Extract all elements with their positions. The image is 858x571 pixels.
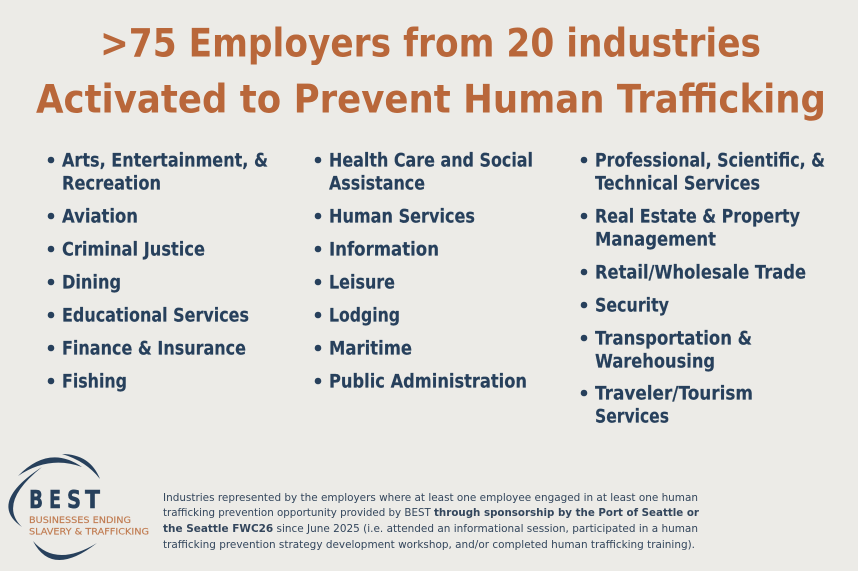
icon: BEST logo: BUSINESSES ENDING: [29, 516, 131, 526]
icon: BEST logo: SLAVERY & TRAFFICKING: [29, 528, 149, 538]
panel: industry list column 2: Assistance: [329, 174, 425, 195]
panel: industry list column 1: Fishing: [62, 372, 127, 393]
panel: industry list column 3: Technical Services: [595, 174, 760, 195]
panel: industry list column 3: Management: [595, 230, 716, 251]
icon: BEST logo: B: [29, 485, 43, 514]
footnote text: the Seattle FWC26 since June 2025 (i.e. attended an informational session, participated in a human: [163, 523, 698, 535]
footnote text: trafficking prevention strategy development workshop, and/or completed human trafficking training).: [163, 539, 695, 551]
panel: industry list column 2: [315, 151, 533, 393]
panel: industry list column 1: Dining: [62, 273, 121, 294]
panel: industry list column 1: Arts, Entertainment, &: [62, 151, 268, 172]
panel: industry list column 2: Lodging: [329, 306, 400, 327]
panel: industry list column 3: Retail/Wholesale Trade: [595, 263, 806, 284]
panel: industry list column 1: Finance & Insurance: [62, 339, 246, 360]
icon: BEST logo: S: [67, 485, 81, 514]
panel: industry list column 3: [581, 151, 825, 428]
icon: BEST logo: [8, 454, 149, 560]
panel: industry list column 3: Traveler/Tourism: [595, 384, 753, 405]
panel: industry list column 1: Educational Services: [62, 306, 249, 327]
panel: industry list column 3: Services: [595, 407, 669, 428]
panel: industry list column 1: [48, 151, 268, 393]
panel: industry list column 2: Maritime: [329, 339, 412, 360]
footnote text: Industries represented by the employers where at least one employee engaged in at least one human: [163, 492, 698, 504]
panel: industry list column 2: Human Services: [329, 207, 475, 228]
panel: industry list column 2: Leisure: [329, 273, 395, 294]
panel: industry list column 3: Real Estate & Property: [595, 207, 800, 228]
panel: industry list column 2: Public Administration: [329, 372, 527, 393]
panel: industry list column 3: Transportation &: [595, 329, 752, 350]
panel: industry list column 3: Warehousing: [595, 352, 715, 373]
icon: BEST logo: E: [49, 485, 61, 514]
footnote text: [163, 492, 700, 551]
panel: industry list column 1: Criminal Justice: [62, 240, 205, 261]
icon: BEST logo: T: [85, 485, 100, 514]
panel: industry list column 1: Aviation: [62, 207, 138, 228]
title: [36, 22, 826, 122]
panel: industry list column 3: Professional, Scientific, &: [595, 151, 825, 172]
panel: industry list column 3: Security: [595, 296, 669, 317]
footnote text: trafficking prevention opportunity provided by BEST through sponsorship by the Port of Seattle or: [163, 507, 700, 519]
panel: industry list column 2: Health Care and Social: [329, 151, 533, 172]
panel: industry list column 2: Information: [329, 240, 439, 261]
title: >75 Employers from 20 industries: [100, 22, 761, 66]
panel: industry list column 1: Recreation: [62, 174, 161, 195]
